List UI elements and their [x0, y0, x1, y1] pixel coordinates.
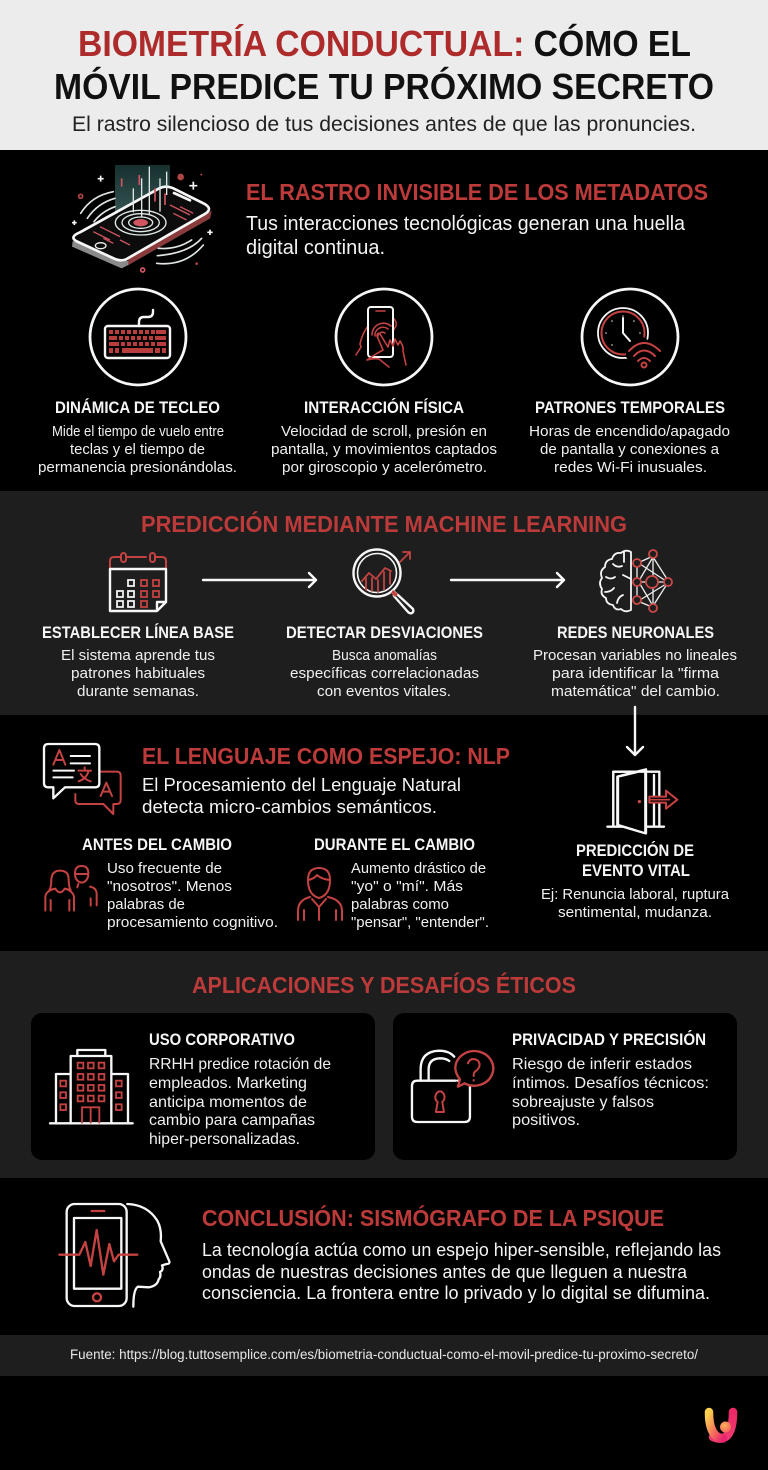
- card text: USO CORPORATIVO: [149, 1031, 295, 1049]
- intro text: Tus interacciones tecnológicas generan una huella: [246, 213, 686, 235]
- panel: machine learning prediction: [0, 491, 768, 715]
- arrow: [451, 573, 564, 587]
- icon: couple: [45, 866, 97, 911]
- column: physical interaction: pantalla, y movimientos captados: [271, 441, 497, 458]
- icon: brain and network: [600, 550, 672, 612]
- column: life event prediction: Ej: Renuncia laboral, ruptura: [541, 886, 730, 903]
- card text: empleados. Marketing: [149, 1075, 307, 1092]
- conclusion text: La tecnología actúa como un espejo hiper-sensible, reflejando las: [202, 1240, 721, 1260]
- column: deviations: con eventos vitales.: [317, 683, 451, 700]
- column: temporal patterns: [529, 399, 730, 476]
- column: keystroke dynamics: Mide el tiempo de vuelo entre: [52, 423, 224, 440]
- column: baseline: [42, 623, 234, 700]
- column: baseline: durante semanas.: [77, 683, 199, 700]
- card: corporate use: [31, 1013, 375, 1160]
- block: before the change: palabras de: [107, 896, 185, 913]
- block: during the change: palabras como: [351, 896, 449, 913]
- title: MÓVIL PREDICE TU PRÓXIMO SECRETO: [54, 65, 714, 107]
- icon: magnifier with chart: [354, 550, 413, 613]
- card text: positivos.: [512, 1112, 580, 1129]
- card text: hiper-personalizadas.: [149, 1131, 300, 1148]
- heading: CONCLUSIÓN: SISMÓGRAFO DE LA PSIQUE: [202, 1204, 664, 1231]
- block: during the change: "pensar", "entender".: [351, 914, 489, 931]
- heading: PREDICCIÓN MEDIANTE MACHINE LEARNING: [141, 510, 627, 537]
- heading: EL RASTRO INVISIBLE DE LOS METADATOS: [246, 179, 708, 205]
- icon: single person: [298, 868, 342, 920]
- column: keystroke dynamics: teclas y el tiempo de: [70, 441, 205, 458]
- panel: metadata trail: [0, 150, 768, 491]
- column: baseline: ESTABLECER LÍNEA BASE: [42, 623, 234, 642]
- column: keystroke dynamics: [38, 398, 237, 476]
- icon: padlock with question: [412, 1051, 493, 1122]
- block: before the change: [45, 836, 278, 931]
- subtitle: El rastro silencioso de tus decisiones antes de que las pronuncies.: [72, 113, 696, 136]
- heading: EL LENGUAJE COMO ESPEJO: NLP: [142, 743, 510, 769]
- block: before the change: procesamiento cognitivo.: [107, 914, 278, 931]
- column: neural networks: matemática" del cambio.: [551, 683, 720, 700]
- arrow: [203, 573, 316, 587]
- block: during the change: "yo" o "mí". Más: [351, 878, 463, 895]
- column: physical interaction: Velocidad de scroll, presión en: [281, 423, 487, 440]
- column: temporal patterns: redes Wi-Fi inusuales.: [554, 459, 707, 476]
- card text: [149, 1031, 331, 1148]
- column: temporal patterns: Horas de encendido/apagado: [529, 423, 730, 440]
- column: physical interaction: INTERACCIÓN FÍSICA: [304, 398, 464, 417]
- arrow: down to life event: [627, 707, 643, 755]
- column: life event prediction: [541, 841, 730, 921]
- intro text: [142, 774, 461, 817]
- column: deviations: DETECTAR DESVIACIONES: [286, 624, 483, 642]
- column: neural networks: Procesan variables no lineales: [533, 647, 737, 664]
- icon: open door: [607, 769, 677, 833]
- card text: RRHH predice rotación de: [149, 1056, 331, 1073]
- icon: calendar: [110, 553, 166, 611]
- title: BIOMETRÍA CONDUCTUAL: CÓMO EL: [78, 22, 691, 64]
- column: deviations: Busca anomalías: [332, 647, 437, 664]
- column: baseline: patrones habituales: [71, 665, 205, 682]
- title: [54, 22, 714, 107]
- column: neural networks: [533, 624, 737, 700]
- card text: anticipa momentos de: [149, 1094, 307, 1111]
- block: during the change: Aumento drástico de: [351, 860, 486, 877]
- column: keystroke dynamics: DINÁMICA DE TECLEO: [55, 398, 220, 417]
- card text: cambio para campañas: [149, 1112, 315, 1129]
- card: privacy and precision: [393, 1013, 737, 1160]
- intro text: [246, 213, 686, 259]
- icon: translation chat bubbles: [44, 744, 121, 814]
- card text: [512, 1030, 709, 1129]
- block: before the change: ANTES DEL CAMBIO: [82, 836, 232, 854]
- icon: hand on phone: [336, 289, 432, 385]
- intro text: digital continua.: [246, 237, 385, 259]
- column: life event prediction: EVENTO VITAL: [582, 862, 690, 880]
- block: during the change: [298, 836, 489, 931]
- heading: APLICACIONES Y DESAFÍOS ÉTICOS: [192, 971, 576, 998]
- intro text: El Procesamiento del Lenguaje Natural: [142, 774, 461, 795]
- panel: conclusion: [0, 1178, 768, 1335]
- column: life event prediction: PREDICCIÓN DE: [576, 841, 694, 860]
- icon: phone, pulse and head: [59, 1204, 169, 1307]
- card text: Riesgo de inferir estados: [512, 1056, 692, 1073]
- block: before the change: Uso frecuente de: [107, 860, 222, 877]
- panel: source footer: Fuente: https://blog.tuttosemplice.com/es/biometria-conductual-como-el-movil-predice-tu-proximo-secreto/: [70, 1347, 698, 1362]
- icon: clock and wifi: [582, 289, 678, 385]
- block: before the change: "nosotros". Menos: [107, 878, 232, 895]
- conclusion text: consciencia. La frontera entre lo privado y lo digital se difumina.: [202, 1283, 710, 1303]
- column: temporal patterns: PATRONES TEMPORALES: [535, 399, 725, 417]
- icon: keyboard: [90, 289, 186, 385]
- column: temporal patterns: de pantalla y conexiones a: [540, 441, 720, 458]
- intro text: detecta micro-cambios semánticos.: [142, 796, 437, 817]
- column: deviations: específicas correlacionadas: [290, 665, 479, 682]
- icon: isometric phone with signal: [72, 165, 213, 272]
- panel: source footer: [0, 1335, 768, 1376]
- icon: office building: [50, 1050, 133, 1123]
- block: during the change: DURANTE EL CAMBIO: [314, 836, 475, 854]
- card text: sobreajuste y falsos: [512, 1094, 654, 1111]
- conclusion text: ondas de nuestras decisiones antes de que lleguen a nuestra: [202, 1262, 688, 1282]
- column: keystroke dynamics: permanencia presionándolas.: [38, 459, 237, 476]
- conclusion text: [202, 1240, 721, 1303]
- column: neural networks: REDES NEURONALES: [557, 624, 714, 642]
- column: life event prediction: sentimental, mudanza.: [558, 904, 712, 921]
- panel: language as mirror: [0, 707, 768, 951]
- column: deviations: [286, 624, 483, 700]
- card text: íntimos. Desafíos técnicos:: [512, 1075, 709, 1092]
- column: physical interaction: por giroscopio y acelerómetro.: [282, 459, 487, 476]
- card text: PRIVACIDAD Y PRECISIÓN: [512, 1030, 706, 1049]
- panel: header: [0, 0, 768, 150]
- panel: applications and ethics: [0, 951, 768, 1178]
- icon: logo: [709, 1412, 733, 1439]
- column: physical interaction: [271, 398, 497, 476]
- column: baseline: El sistema aprende tus: [61, 647, 215, 664]
- column: neural networks: para identificar la "firma: [552, 665, 720, 682]
